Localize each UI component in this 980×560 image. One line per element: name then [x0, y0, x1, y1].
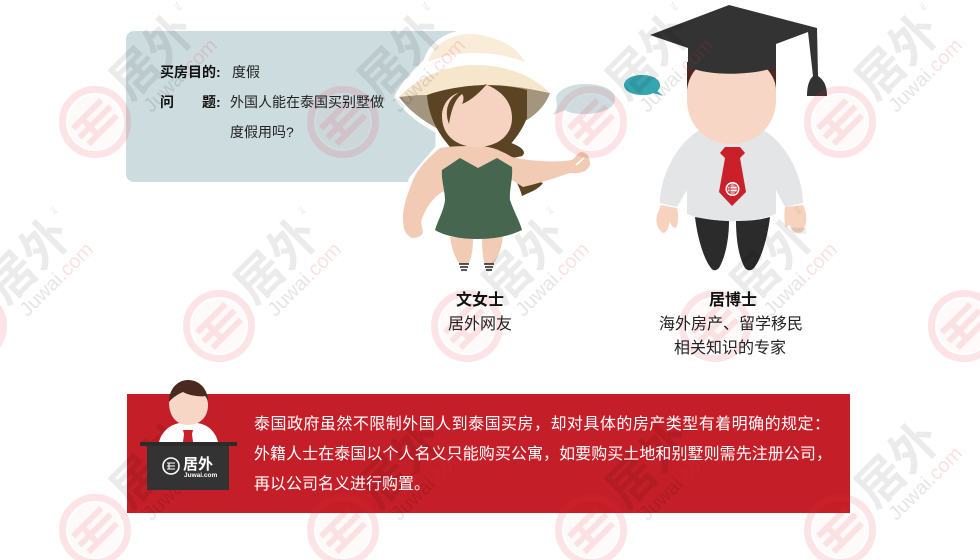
hands — [656, 205, 806, 233]
watermark pattern: Juwai.com — [388, 443, 470, 525]
watermark pattern: TM — [668, 2, 678, 13]
watermark pattern: Juwai.com — [760, 239, 842, 321]
presenter hair — [169, 380, 208, 404]
speech bubble: teal — [624, 75, 663, 96]
hand finger gap — [576, 158, 584, 165]
shirt — [660, 126, 803, 222]
hat brim — [399, 65, 550, 97]
presenter shirt — [159, 423, 218, 442]
podium body — [147, 446, 229, 490]
trousers — [695, 217, 770, 270]
watermark pattern: TM — [792, 206, 802, 217]
watermark pattern: TM — [296, 206, 306, 217]
watermark pattern: TM — [48, 206, 58, 217]
presenter at podium — [140, 380, 237, 490]
watermark pattern: 居外 — [224, 208, 330, 314]
watermark pattern: TM — [544, 206, 554, 217]
red tie with logo — [719, 147, 746, 206]
mortarboard cap — [650, 5, 827, 96]
watermark pattern: 居外 — [348, 412, 454, 518]
question text block — [160, 64, 384, 140]
watermark pattern: Juwai.com — [512, 239, 594, 321]
character: Ms Wen — [399, 34, 590, 270]
watermark pattern: 居外 — [596, 412, 702, 518]
face — [687, 68, 776, 144]
watermark pattern: Juwai.com — [885, 35, 967, 117]
speech bubble: pale — [553, 84, 615, 115]
watermark pattern: 居外 — [100, 4, 206, 110]
caption: Ms Wen: 文女士 — [456, 290, 504, 309]
watermark pattern: 居外 — [348, 4, 454, 110]
banner text — [254, 415, 832, 493]
watermark pattern: Juwai.com — [140, 443, 222, 525]
watermark pattern: 居外 — [596, 4, 702, 110]
question text block: 度假用吗? — [230, 124, 294, 140]
watermark pattern: 居外 — [472, 208, 578, 314]
podium logo: Juwai.com — [184, 472, 217, 479]
watermark pattern: Juwai.com — [264, 239, 346, 321]
watermark pattern: 居外 — [845, 412, 951, 518]
hair — [687, 62, 776, 89]
question text block: 买房目的: — [160, 64, 221, 80]
caption: Dr Ju: 居博士 — [709, 290, 757, 309]
presenter face — [169, 392, 208, 425]
question text block: 问 — [160, 94, 174, 110]
watermark pattern: Juwai.com — [636, 443, 718, 525]
banner text: 再以公司名义进行购置。 — [254, 475, 430, 493]
watermark pattern: TM — [420, 2, 430, 13]
watermark pattern: Juwai.com — [388, 35, 470, 117]
hair — [427, 85, 527, 150]
caption: Dr Ju — [659, 290, 803, 357]
podium top — [140, 442, 237, 446]
question text block: 度假 — [232, 64, 260, 80]
watermark pattern: 居外 — [100, 412, 206, 518]
panel: question card — [126, 31, 471, 182]
red banner background — [127, 394, 850, 513]
caption: Ms Wen: 居外网友 — [448, 315, 512, 333]
question text block: 题: — [202, 94, 221, 110]
watermark pattern: Juwai.com — [885, 443, 967, 525]
presenter tie — [183, 430, 193, 442]
watermark pattern: TM — [917, 2, 927, 13]
watermark pattern: TM — [172, 2, 182, 13]
ponytail — [498, 140, 543, 196]
hat underside — [399, 78, 550, 130]
banner text: 泰国政府虽然不限制外国人到泰国买房，却对具体的房产类型有着明确的规定： — [254, 415, 830, 433]
podium logo — [163, 455, 217, 479]
dress — [435, 158, 522, 239]
watermark pattern: Juwai.com — [636, 35, 718, 117]
banner text: 外籍人士在泰国以个人名义只能购买公寓，如要购买土地和别墅则需先注册公司， — [254, 445, 832, 463]
white silhouette outline — [399, 34, 550, 238]
face — [442, 85, 512, 147]
watermark pattern: Juwai.com — [16, 239, 98, 321]
legs — [450, 235, 503, 264]
shoes — [459, 264, 494, 270]
hat crown — [428, 34, 525, 62]
hair fringe — [447, 84, 487, 124]
caption: Ms Wen — [448, 290, 512, 333]
arms and shoulders — [403, 146, 590, 238]
watermark pattern: Juwai.com — [140, 35, 222, 117]
watermark pattern: 居外 — [720, 208, 826, 314]
character: Dr Ju — [650, 5, 827, 270]
podium logo: 居外 — [183, 455, 213, 473]
caption: Dr Ju: 相关知识的专家 — [674, 339, 786, 357]
caption: Dr Ju: 海外房产、留学移民 — [659, 315, 803, 333]
watermark pattern: 居外 — [845, 4, 951, 110]
question text block: 外国人能在泰国买别墅做 — [230, 94, 384, 110]
